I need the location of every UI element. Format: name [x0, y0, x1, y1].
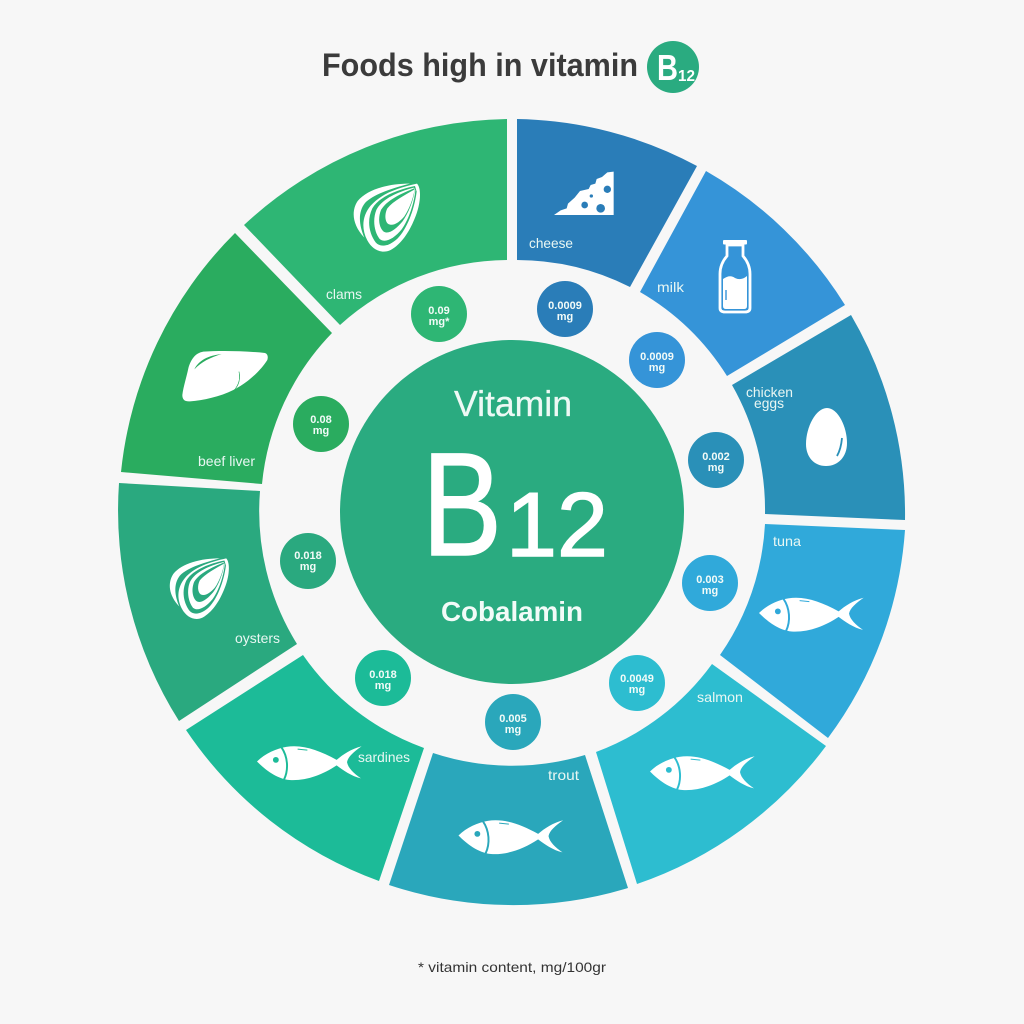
label: cheese: cheese — [529, 235, 573, 251]
panel: cheese — [517, 119, 697, 287]
value: sardines: mg — [375, 680, 391, 692]
value: milk: 0.0009 — [640, 351, 674, 363]
value: chicken eggs: mg — [708, 462, 724, 474]
icon: clam shell — [354, 184, 420, 252]
value: beef liver: mg — [313, 425, 329, 437]
value: cheese: 0.0009 — [548, 300, 582, 312]
heading: Cobalamin: Cobalamin — [441, 596, 583, 627]
label: milk: milk — [657, 279, 685, 295]
title — [322, 41, 699, 93]
icon: milk bottle — [720, 240, 750, 312]
value: salmon: mg — [629, 684, 645, 696]
label: chicken eggs — [746, 384, 793, 411]
icon: fish — [650, 756, 755, 790]
icon: egg — [806, 408, 847, 466]
value: cheese: mg — [557, 311, 573, 323]
value: cheese — [537, 281, 593, 337]
panel: sardines — [186, 655, 424, 881]
label: clams: clams — [326, 286, 362, 302]
panel: tuna — [720, 524, 905, 738]
value: milk: mg — [649, 362, 665, 374]
panel: oysters — [118, 483, 297, 721]
label: oysters: oysters — [235, 630, 280, 646]
icon: liver — [182, 351, 268, 401]
value: tuna: mg — [702, 585, 718, 597]
panel: beef liver — [121, 233, 332, 484]
value: oysters — [280, 533, 336, 589]
panel: milk — [640, 171, 845, 376]
value: chicken eggs: 0.002 — [702, 451, 730, 463]
icon: fish — [458, 820, 563, 854]
panel: chicken eggs — [732, 315, 905, 520]
value: clams: mg* — [429, 316, 450, 328]
value: tuna: 0.003 — [696, 574, 724, 586]
label: chicken eggs: chicken — [746, 384, 793, 400]
title: Foods high in vitamin — [322, 47, 638, 83]
heading: Vitamin: Vitamin — [454, 383, 572, 424]
badge: B12 — [647, 41, 699, 93]
value: beef liver — [293, 396, 349, 452]
heading: B12: B — [422, 423, 502, 587]
icon: cheese — [554, 172, 614, 215]
icon: fish — [759, 598, 864, 632]
panel: trout — [389, 753, 628, 905]
label: tuna: tuna — [773, 533, 801, 549]
panel: clams — [244, 119, 507, 325]
label: chicken eggs: eggs — [754, 395, 784, 411]
value: sardines: 0.018 — [369, 669, 397, 681]
footnote: * vitamin content, mg/100gr — [418, 959, 606, 975]
icon: fish — [257, 746, 362, 780]
value: sardines — [355, 650, 411, 706]
panel: salmon — [596, 664, 826, 884]
value: clams: 0.09 — [428, 305, 450, 317]
value: oysters: mg — [300, 561, 316, 573]
badge: B12: B — [657, 47, 678, 88]
badge: B12: 12 — [678, 68, 695, 85]
label: beef liver: beef liver — [198, 453, 255, 469]
value: oysters: 0.018 — [294, 550, 322, 562]
value: trout: mg — [505, 724, 521, 736]
center circle: vitamin B12 — [340, 340, 684, 684]
label: sardines: sardines — [358, 749, 410, 765]
label: trout: trout — [548, 767, 579, 783]
value: milk — [629, 332, 685, 388]
heading: B12 — [422, 423, 608, 587]
value: trout — [485, 694, 541, 750]
value: beef liver: 0.08 — [310, 414, 332, 426]
heading: B12: 12 — [506, 475, 608, 576]
value: trout: 0.005 — [499, 713, 527, 725]
value: tuna — [682, 555, 738, 611]
value: clams — [411, 286, 467, 342]
value: salmon — [609, 655, 665, 711]
value: chicken eggs — [688, 432, 744, 488]
label: salmon: salmon — [697, 689, 743, 705]
icon: oyster shell — [170, 558, 229, 619]
value: salmon: 0.0049 — [620, 673, 654, 685]
